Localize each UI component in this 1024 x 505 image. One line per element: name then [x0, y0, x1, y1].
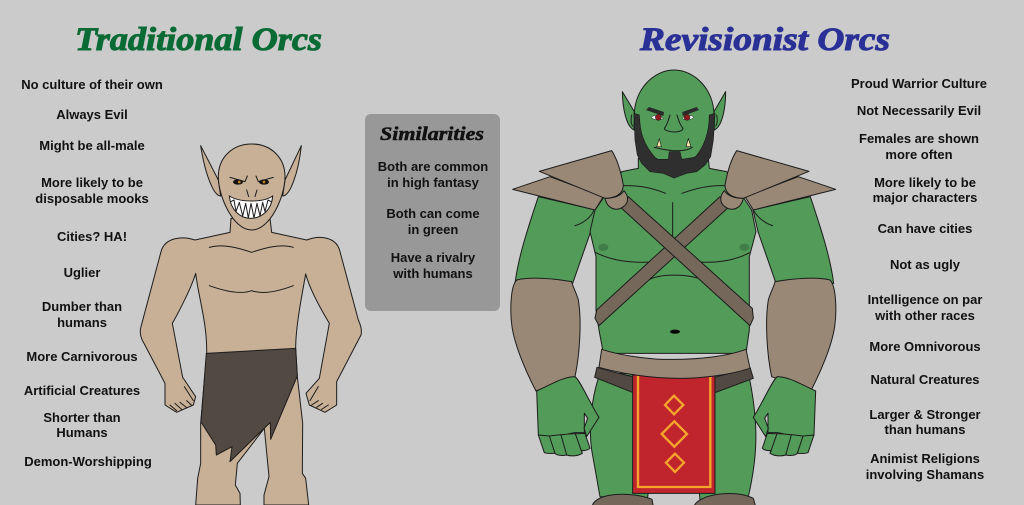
palm — [537, 377, 599, 437]
head — [218, 144, 285, 230]
trait: with other races — [874, 308, 975, 323]
trait: Larger & Stronger — [869, 407, 981, 422]
title: Traditional Orcs: Traditional Orcs — [75, 22, 322, 58]
gold diamonds — [662, 396, 687, 472]
trait: Can have cities — [878, 221, 972, 236]
teeth — [231, 200, 271, 218]
trait: Shorter than — [43, 410, 121, 425]
torso — [590, 158, 756, 353]
trait: more often — [885, 147, 953, 162]
head — [634, 70, 714, 167]
fingers — [538, 433, 590, 456]
left arm — [515, 197, 596, 283]
arm crease lines — [575, 210, 773, 226]
illustration: revisionist orc — [511, 70, 836, 505]
trait: Always Evil — [56, 107, 128, 122]
loincloth — [201, 348, 297, 462]
trait: No culture of their own — [21, 77, 163, 92]
trait: Natural Creatures — [870, 372, 980, 387]
nose and mouth — [654, 115, 692, 151]
trait: Proud Warrior Culture — [851, 76, 987, 91]
trait: Artificial Creatures — [24, 383, 140, 398]
similarity: in high fantasy — [387, 175, 480, 190]
panel heading: Similarities — [380, 124, 484, 145]
similarity: Have a rivalry — [391, 250, 476, 265]
panel: similarities — [365, 114, 500, 311]
similarity: Both can come — [386, 206, 480, 221]
boots — [592, 493, 756, 505]
beard — [634, 113, 715, 178]
trait: Females are shown — [859, 131, 979, 146]
trait: involving Shamans — [866, 467, 984, 482]
red loincloth — [633, 375, 715, 493]
trait: Animist Religions — [870, 451, 980, 466]
right fist — [753, 377, 816, 456]
trait: major characters — [873, 190, 977, 205]
trait: Not as ugly — [890, 257, 961, 272]
ears — [622, 92, 726, 130]
trait: humans — [57, 315, 107, 330]
navel — [670, 330, 680, 334]
body — [140, 218, 361, 505]
right bracer — [767, 278, 836, 391]
trait: Dumber than — [42, 299, 122, 314]
ears — [201, 146, 301, 196]
similarity: with humans — [392, 266, 473, 281]
gold trim — [638, 375, 710, 487]
eyes and brows — [233, 179, 243, 185]
brows — [646, 107, 699, 116]
tusks — [657, 139, 691, 147]
trait: More likely to be — [874, 175, 976, 190]
text list: revisionist orc traits — [851, 76, 987, 482]
belt — [599, 349, 750, 378]
trait: More Omnivorous — [869, 339, 981, 354]
title: Revisionist Orcs: Revisionist Orcs — [639, 22, 890, 58]
eyes — [651, 115, 694, 120]
legs — [590, 373, 756, 500]
trait: Intelligence on par — [868, 292, 982, 307]
similarity: in green — [408, 222, 458, 237]
chest and belly lines — [596, 186, 749, 281]
grin — [229, 196, 273, 218]
trait: Not Necessarily Evil — [857, 103, 981, 118]
trait: Cities? HA! — [57, 229, 127, 244]
trait: More likely to be — [41, 175, 143, 190]
trait: More Carnivorous — [26, 349, 138, 364]
text list: traditional orc traits — [21, 77, 163, 469]
chest lines — [170, 246, 328, 411]
illustration: traditional orc — [140, 144, 361, 505]
trait: Might be all-male — [39, 138, 145, 153]
trait: Humans — [56, 425, 108, 440]
nipples — [598, 244, 608, 251]
trait: Demon-Worshipping — [24, 454, 152, 469]
trait: Uglier — [64, 265, 100, 280]
shoulder pad right — [721, 151, 836, 210]
shoulder pad left — [513, 151, 628, 210]
trait: than humans — [885, 422, 965, 437]
loin straps — [595, 367, 753, 393]
strap crossing left to right — [622, 197, 753, 326]
left bracer — [511, 278, 580, 391]
right arm — [753, 197, 834, 283]
left fist — [537, 377, 599, 456]
similarity: Both are common — [378, 159, 488, 174]
trait: disposable mooks — [35, 191, 149, 206]
strap crossing right to left — [595, 197, 727, 326]
